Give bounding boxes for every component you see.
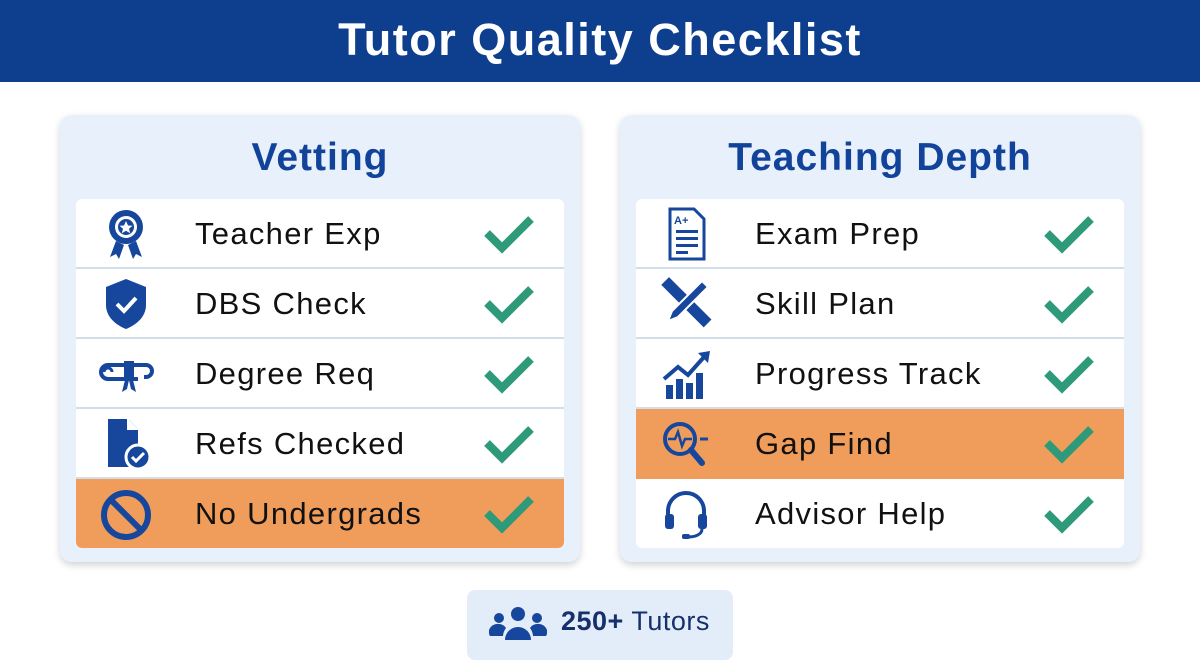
icon: check — [484, 356, 534, 394]
row: teacher exp — [76, 199, 564, 269]
text: tutor count: 250+ Tutors — [561, 606, 710, 636]
panel: teaching depth — [620, 115, 1140, 562]
heading: vetting: Vetting — [251, 136, 388, 179]
badge: tutor count — [467, 590, 733, 660]
row: skill plan — [636, 269, 1124, 339]
icon: check — [1044, 216, 1094, 254]
icon: people — [489, 607, 547, 640]
row: degree req: Degree Req — [195, 356, 375, 391]
row: gap find (highlighted) — [636, 409, 1124, 479]
row: advisor help — [665, 491, 1094, 539]
list: vetting items — [76, 199, 564, 548]
icon: diploma scroll — [99, 361, 154, 392]
icon: check — [484, 216, 534, 254]
icon: magnifier — [663, 422, 708, 466]
row: progress track — [636, 339, 1124, 409]
row: progress track: Progress Track — [755, 356, 982, 391]
icon: award badge — [109, 210, 143, 259]
row: no undergrads (highlighted) — [76, 479, 564, 549]
icon: prohibited — [101, 490, 151, 540]
list: teaching items — [636, 199, 1124, 548]
row: gap find (highlighted): Gap Find — [755, 426, 893, 461]
panel: vetting — [60, 115, 580, 562]
row: dbs check — [76, 269, 564, 339]
icon: check — [1044, 496, 1094, 534]
icon: check — [484, 286, 534, 324]
icon: document check — [108, 419, 148, 468]
row: teacher exp: Teacher Exp — [195, 216, 382, 251]
icon: exam paper — [668, 208, 706, 260]
icon: exam paper: A+ — [674, 215, 688, 227]
icon: ruler and pencil — [661, 277, 712, 328]
title: Tutor Quality Checklist — [338, 14, 862, 65]
icon: check — [1044, 356, 1094, 394]
row: no undergrads (highlighted): No Undergrads — [195, 496, 422, 531]
title — [0, 0, 1200, 82]
row: exam prep — [636, 199, 1124, 269]
icon: check — [484, 496, 534, 534]
row: refs checked — [76, 409, 564, 479]
row: degree req — [76, 339, 564, 409]
icon: check — [1044, 286, 1094, 324]
icon: growth chart — [662, 351, 710, 399]
row: exam prep: Exam Prep — [755, 216, 920, 251]
row: advisor help: Advisor Help — [755, 496, 946, 531]
row: refs checked: Refs Checked — [195, 426, 405, 461]
row: skill plan: Skill Plan — [755, 286, 896, 321]
heading: teaching depth: Teaching Depth — [728, 136, 1032, 179]
icon: check — [484, 426, 534, 464]
row: dbs check: DBS Check — [195, 286, 367, 321]
icon: headset — [665, 491, 707, 539]
icon: shield — [106, 279, 146, 329]
icon: check — [1044, 426, 1094, 464]
